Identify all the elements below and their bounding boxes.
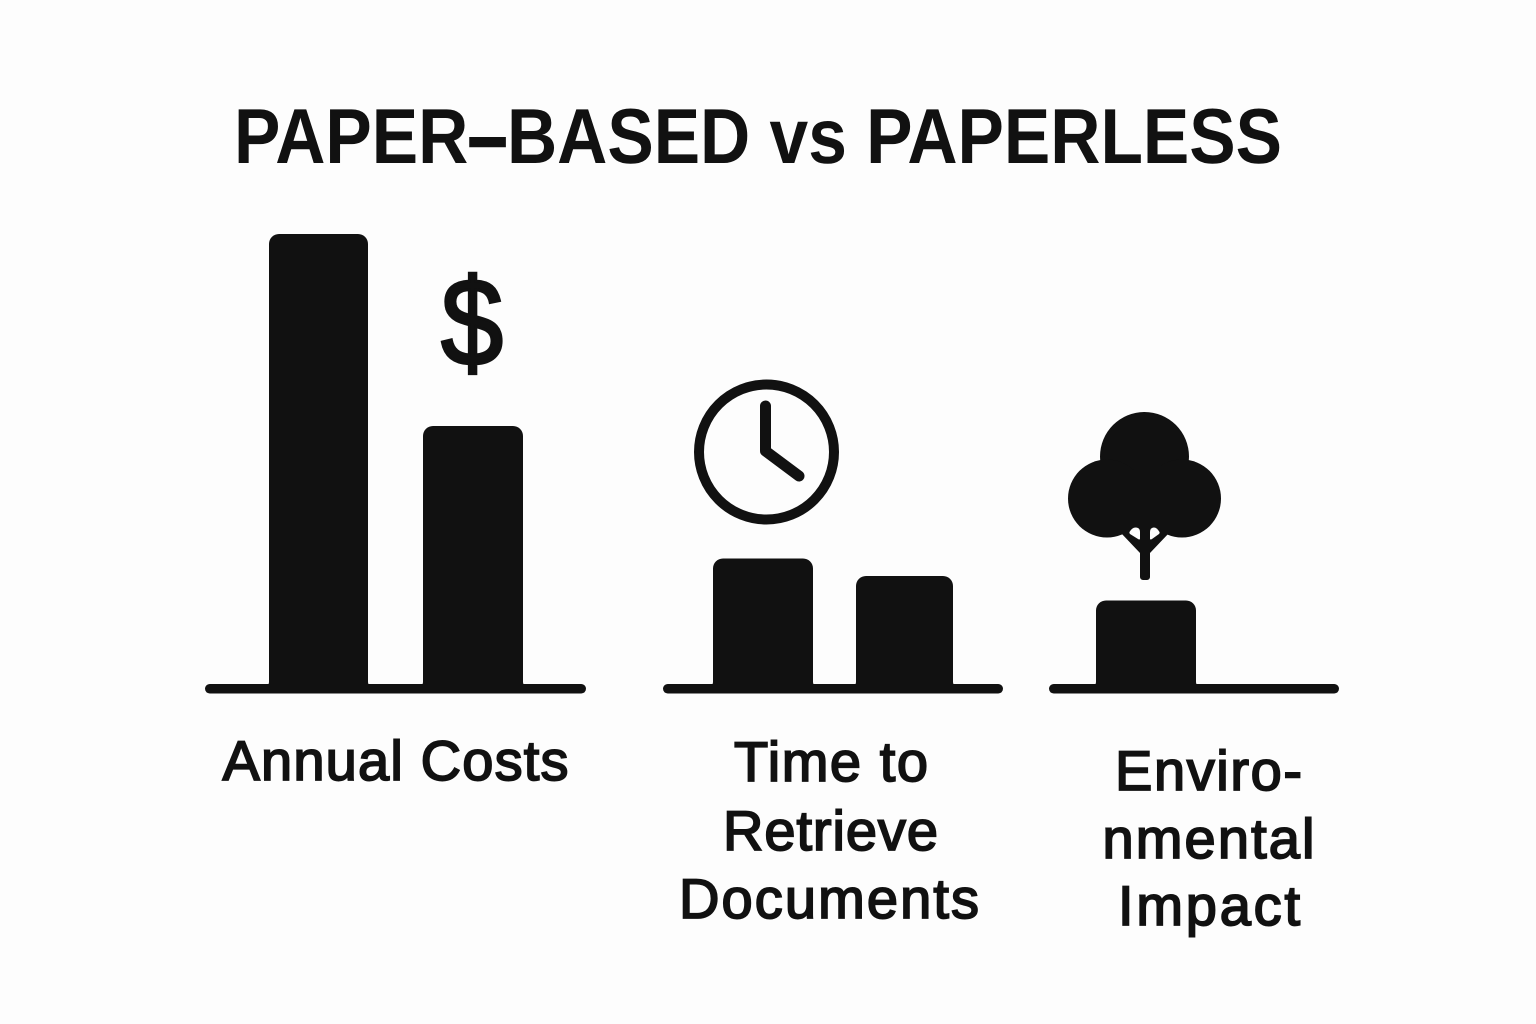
chart: annual costs [205, 234, 586, 694]
icon: tree [1068, 412, 1221, 580]
label: environmental impact: Impact [1118, 874, 1300, 937]
chart: time to retrieve documents [663, 384, 1003, 694]
title: PAPER–BASED vs PAPERLESS [234, 92, 1282, 180]
label: time to retrieve documents [679, 730, 979, 930]
bar: paperless annual costs [420, 426, 526, 685]
label: time to retrieve documents: Retrieve [723, 799, 938, 862]
icon: clock [699, 384, 834, 520]
label: time to retrieve documents: Time to [734, 730, 928, 793]
label: environmental impact: nmental [1102, 807, 1314, 870]
baseline: environmental impact [1049, 684, 1339, 694]
label: environmental impact: Enviro- [1115, 739, 1302, 802]
baseline: annual costs [205, 684, 586, 694]
bar: paper-based annual costs [266, 234, 371, 685]
label: time to retrieve documents: Documents [679, 867, 979, 930]
label: annual costs: Annual Costs [222, 729, 568, 792]
bar: paper-based retrieval time [710, 558, 816, 685]
bar: environmental impact [1093, 600, 1199, 685]
chart: environmental impact [1049, 412, 1339, 694]
icon: dollar sign: $ [441, 254, 503, 392]
baseline: time to retrieve [663, 684, 1003, 694]
bar: paperless retrieval time [853, 576, 956, 685]
label: environmental impact [1102, 739, 1314, 937]
